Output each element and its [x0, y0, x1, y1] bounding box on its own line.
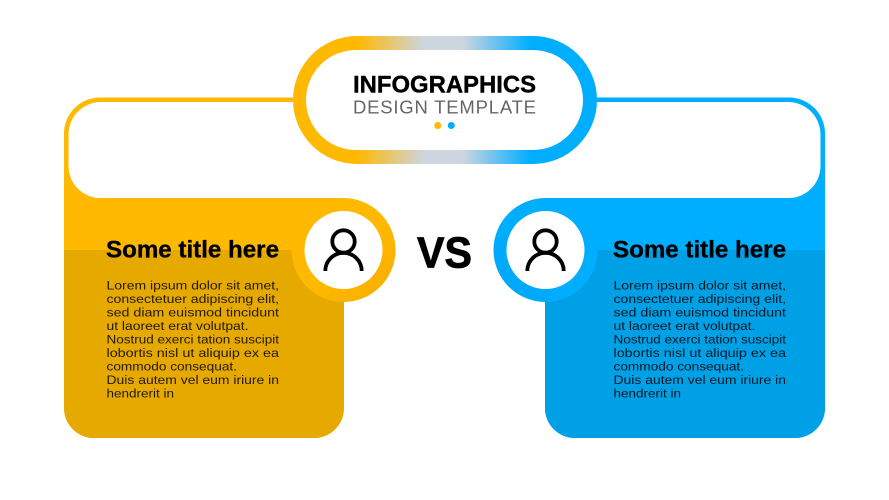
right body text: consectetuer adipiscing elit, [614, 292, 786, 306]
left body text: Lorem ipsum dolor sit amet, [106, 278, 279, 292]
right avatar white disc [506, 211, 584, 289]
left panel frame and card [64, 98, 344, 438]
left body text: hendrerit in [106, 386, 174, 400]
left body text: consectetuer adipiscing elit, [106, 292, 279, 306]
left body text: sed diam euismod tincidunt [106, 306, 280, 320]
left heading: Some title here [106, 236, 279, 264]
right body text: commodo consequat. [614, 360, 744, 374]
right avatar ring [494, 198, 598, 302]
panel: right option [489, 98, 825, 438]
left body text: Nostrud exerci tation suscipit [106, 332, 280, 346]
left body text: commodo consequat. [106, 360, 237, 374]
pill gradient ring [293, 36, 597, 164]
panel: left option [64, 98, 400, 438]
right body text [614, 278, 787, 400]
icon: left person [325, 230, 362, 271]
VS label: VS [417, 228, 472, 278]
yellow dot [434, 122, 441, 129]
right body text: Duis autem vel eum iriure in [614, 373, 786, 387]
right frame white interior [489, 102, 820, 198]
right body text: sed diam euismod tincidunt [614, 306, 787, 320]
left body text: ut laoreet erat volutpat. [106, 319, 248, 333]
right body text: lobortis nisl ut aliquip ex ea [614, 346, 786, 360]
right body text: hendrerit in [614, 386, 681, 400]
left avatar ring [292, 198, 396, 302]
right panel frame and card [545, 98, 825, 438]
right body text: Lorem ipsum dolor sit amet, [614, 278, 786, 292]
left card darker lower section [64, 250, 344, 438]
title: INFOGRAPHICS [353, 72, 536, 99]
left body text: Duis autem vel eum iriure in [106, 373, 279, 387]
icon: right person [527, 230, 564, 271]
left avatar white disc [304, 211, 382, 289]
subtitle: DESIGN TEMPLATE [353, 97, 536, 118]
right body text: ut laoreet erat volutpat. [614, 319, 756, 333]
left body text [106, 278, 280, 400]
pill white interior [306, 50, 583, 150]
right heading: Some title here [613, 236, 786, 264]
left frame white interior [68, 102, 400, 198]
left body text: lobortis nisl ut aliquip ex ea [106, 346, 279, 360]
right card darker lower section [545, 250, 825, 438]
header pill [293, 36, 597, 164]
right body text: Nostrud exerci tation suscipit [614, 332, 787, 346]
blue dot [448, 122, 455, 129]
